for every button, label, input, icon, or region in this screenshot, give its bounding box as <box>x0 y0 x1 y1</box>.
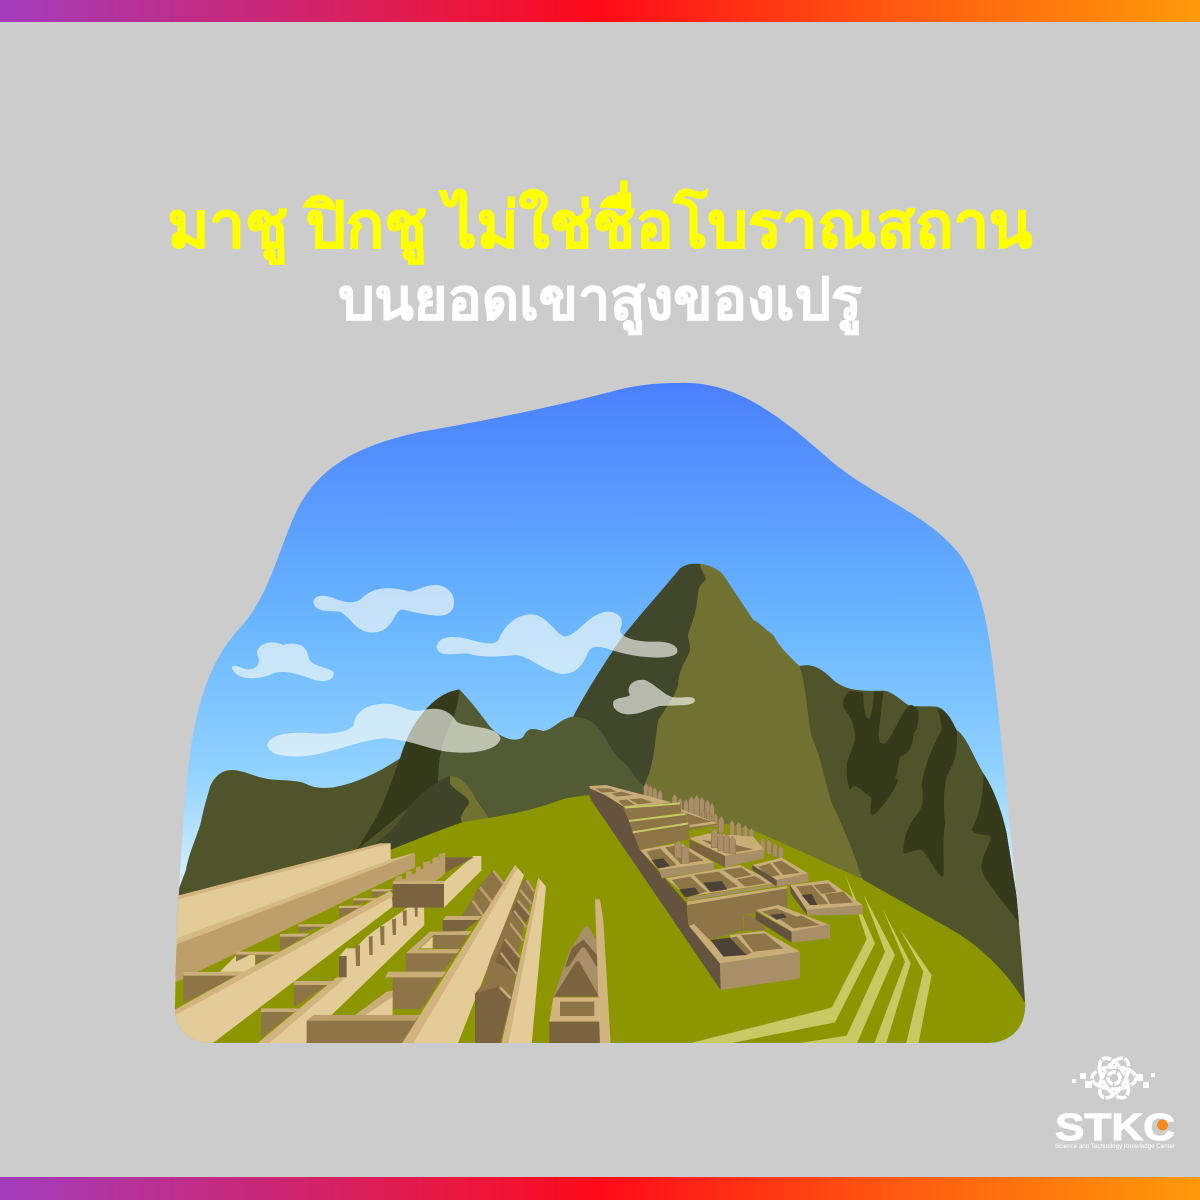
title: มาชู ปิกชู ไม่ใช่ชื่อโบราณสถาน <box>168 191 1032 261</box>
cloud 2 <box>232 642 334 681</box>
logo pixel squares <box>1072 1073 1155 1088</box>
great diagonal wall <box>402 865 524 1044</box>
cloud 1 <box>313 585 454 633</box>
walled enclosure <box>393 883 444 908</box>
citadel base <box>588 787 721 990</box>
cloud 3 <box>437 612 677 674</box>
cloud 5 <box>613 680 695 714</box>
top gradient bar <box>0 0 1200 22</box>
chamber A <box>640 843 714 870</box>
stepped chambers <box>443 920 478 932</box>
rear chamber <box>686 812 718 830</box>
subtitle: บนยอดเขาสูงของเปรู <box>338 268 862 332</box>
main peak <box>573 563 862 878</box>
small chambers <box>183 972 245 1003</box>
long wall middle <box>163 897 393 1044</box>
large retaining block <box>687 887 787 940</box>
terraces <box>623 803 681 821</box>
chamber with hedge <box>689 833 764 856</box>
toothed wall <box>270 908 424 1043</box>
upper frames <box>589 785 672 807</box>
left mountains <box>173 689 663 903</box>
logo atom symbol <box>1092 1053 1136 1103</box>
green meadow <box>170 795 1030 1050</box>
hedges <box>644 783 783 859</box>
logo wordmark: STKC <box>1055 1107 1175 1149</box>
chamber E <box>756 905 830 932</box>
clouds <box>232 585 695 757</box>
left ruins <box>163 843 611 1044</box>
long wall upper <box>163 843 391 943</box>
sky <box>170 380 1030 1050</box>
main citadel ruins <box>588 783 863 990</box>
logo orange dot <box>1157 1120 1168 1130</box>
chamber C <box>752 858 808 880</box>
cloud 4 <box>267 704 501 757</box>
illustration: Machu Picchu scene <box>163 380 1033 1050</box>
long wall lower <box>163 853 415 988</box>
gabled houses row <box>475 879 534 1044</box>
chamber B <box>666 865 776 897</box>
narrow wall <box>502 877 546 1044</box>
right mountain <box>799 665 1033 1050</box>
bottom gradient bar <box>0 1177 1200 1200</box>
chamber D <box>790 880 863 910</box>
logo tagline: Science and Technology Knowledge Center <box>1055 1144 1175 1150</box>
logo: STKC <box>1055 1053 1175 1150</box>
front chamber <box>744 915 767 931</box>
terraced paths <box>687 874 932 1044</box>
front gabled house <box>553 927 600 997</box>
